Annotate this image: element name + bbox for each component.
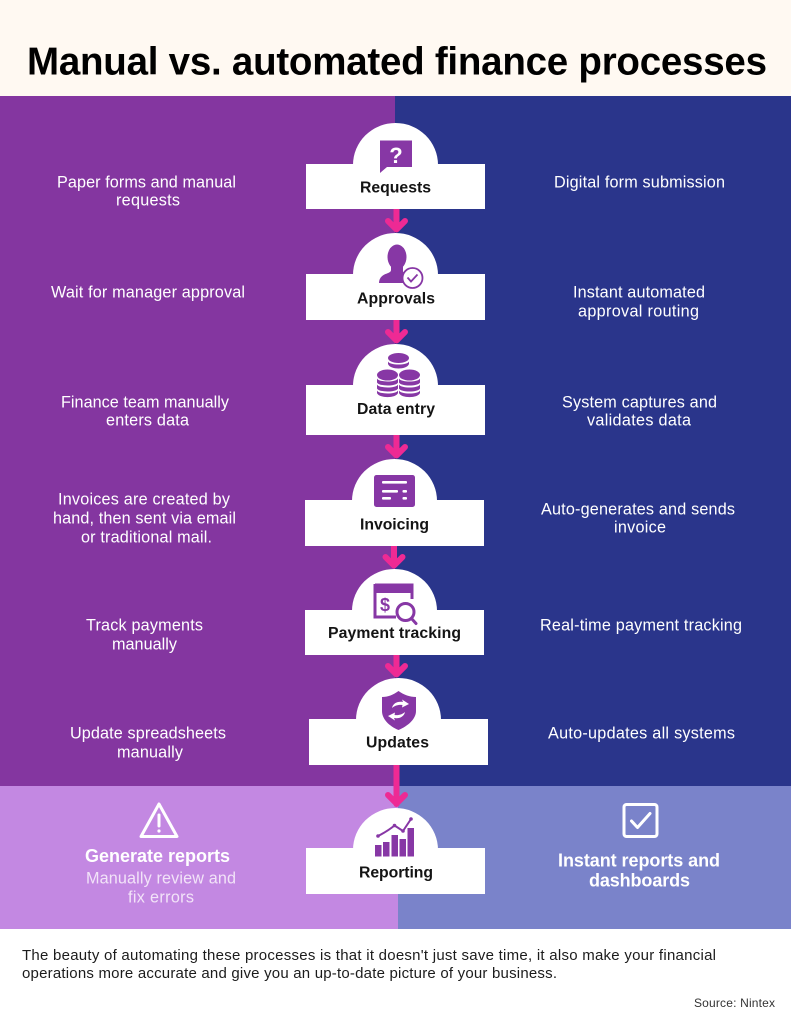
text: manual data entry: enters data — [106, 412, 189, 430]
panel: automated outcome background — [398, 786, 791, 929]
arrow: approvals to data entry — [388, 320, 405, 340]
text: manual data entry — [61, 394, 230, 430]
text: generate reports: Manually review and — [86, 870, 236, 888]
text: automated invoicing — [541, 500, 735, 536]
text: source: Source: Nintex — [694, 996, 775, 1010]
text: automated data entry: validates data — [587, 412, 691, 430]
text: instant reports: dashboards — [589, 870, 690, 890]
text: automated invoicing: Auto-generates and sends — [541, 500, 735, 518]
text: manual approvals: Wait for manager approval — [51, 284, 245, 302]
text: manual updates: manually — [117, 744, 184, 762]
arrow: invoicing to payment tracking — [386, 546, 402, 566]
step: approvals — [306, 233, 485, 320]
icon: shield with refresh arrows — [382, 691, 416, 730]
step: payment tracking — [305, 569, 484, 655]
label: payment tracking: Payment tracking — [328, 625, 461, 642]
header band with title — [0, 0, 791, 96]
text: automated payment tracking: Real-time payment tracking — [540, 616, 742, 634]
icon: question speech bubble: ? — [389, 143, 403, 168]
arrow: payment tracking to updates — [388, 655, 405, 674]
text: generate reports: fix errors — [128, 888, 194, 906]
text: instant reports: Instant reports and — [558, 850, 720, 870]
text: closing statement — [22, 947, 716, 982]
text: manual payment tracking: manually — [112, 636, 178, 654]
label: requests: Requests — [360, 180, 431, 196]
icon: warning triangle — [141, 804, 177, 836]
icon: person with check badge — [379, 244, 422, 288]
arrow: updates to reporting — [388, 765, 405, 804]
text: generate reports — [85, 846, 236, 906]
icon: checked box — [624, 804, 657, 836]
text: automated requests: Digital form submission — [554, 174, 725, 192]
text: manual updates: Update spreadsheets — [70, 724, 226, 742]
arrow: requests to approvals — [388, 209, 405, 230]
step: requests — [306, 123, 485, 209]
icon: invoice form — [374, 475, 415, 507]
label: invoicing: Invoicing — [360, 516, 429, 534]
text: manual requests: requests — [116, 192, 180, 210]
panel: manual outcome background — [0, 786, 399, 929]
text: automated updates: Auto-updates all systems — [548, 724, 735, 742]
step: data entry — [306, 344, 485, 435]
text: manual payment tracking — [86, 616, 203, 654]
icon: payment window with magnifier: $ — [380, 595, 390, 615]
header band with title: Manual vs. automated finance processes — [27, 40, 767, 84]
text: closing statement: The beauty of automating these processes is that it doesn't just save time, it also make your financial — [22, 947, 716, 964]
text: automated invoicing: invoice — [614, 518, 666, 536]
text: automated data entry: System captures and — [562, 394, 717, 412]
text: automated approvals: Instant automated — [573, 284, 705, 302]
text: manual invoicing — [53, 490, 236, 546]
text: automated approvals: approval routing — [578, 302, 699, 320]
label: updates: Updates — [366, 734, 429, 752]
text: manual requests — [57, 174, 236, 210]
text: manual invoicing: or traditional mail. — [81, 528, 212, 546]
label: reporting: Reporting — [359, 864, 433, 882]
step: updates — [309, 678, 488, 765]
text: closing statement: operations more accurate and give you an up-to-date picture of your business. — [22, 965, 557, 982]
label: data entry: Data entry — [357, 401, 435, 418]
text: manual invoicing: Invoices are created by — [58, 490, 231, 508]
text: automated data entry — [562, 394, 717, 430]
text: manual updates — [70, 724, 226, 762]
text: instant reports — [558, 850, 720, 890]
icon: question speech bubble — [380, 140, 412, 173]
text: manual data entry: Finance team manually — [61, 394, 230, 412]
icon: payment window with magnifier — [374, 584, 416, 624]
text: manual payment tracking: Track payments — [86, 616, 203, 634]
icon: bar chart with trend line — [375, 817, 414, 856]
panel: manual process background — [0, 96, 396, 786]
icon: stacked coins — [377, 353, 420, 397]
text: manual invoicing: hand, then sent via email — [53, 510, 236, 528]
text: automated approvals — [573, 284, 705, 320]
text: manual requests: Paper forms and manual — [57, 174, 236, 192]
step: reporting — [306, 808, 485, 894]
panel: automated process background — [395, 96, 791, 786]
text: generate reports: Generate reports — [85, 846, 230, 866]
arrow: data entry to invoicing — [388, 435, 405, 456]
step: invoicing — [305, 459, 484, 546]
label: approvals: Approvals — [357, 290, 435, 308]
